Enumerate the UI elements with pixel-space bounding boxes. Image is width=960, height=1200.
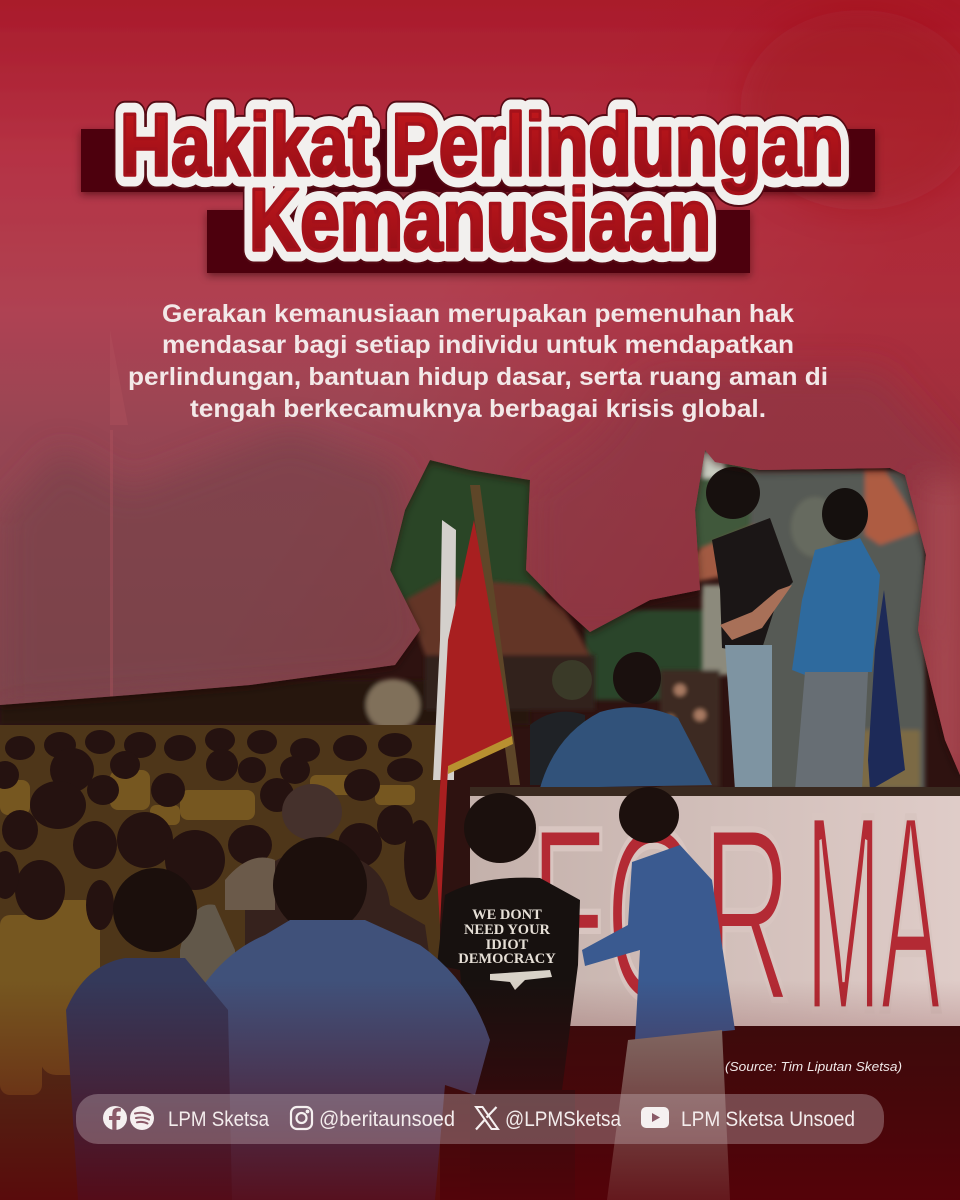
front crowd: student at left <box>66 868 232 1200</box>
title banner bars <box>81 129 875 273</box>
dark tint on lower photo <box>0 980 960 1200</box>
flags and poles <box>433 485 905 925</box>
intro paragraph: perlindungan, bantuan hidup dasar, serta ruang aman di <box>128 363 828 391</box>
icon: spotify <box>130 1106 154 1130</box>
banner with red writing: MA <box>806 757 941 1071</box>
icon: youtube <box>641 1107 669 1128</box>
banner with red writing <box>470 757 960 1071</box>
hall with tiled roof <box>0 578 595 731</box>
intro paragraph: Gerakan kemanusiaan merupakan pemenuhan hak <box>162 300 794 328</box>
intro paragraph <box>128 300 828 423</box>
label: youtube: LPM Sketsa Unsoed <box>681 1108 855 1131</box>
man with slogan t-shirt: IDIOT <box>486 937 529 953</box>
title: Kemanusiaan <box>249 170 711 269</box>
overlay tones and faded silhouettes <box>0 0 960 800</box>
label: instagram: @beritaunsoed <box>319 1108 455 1131</box>
icon: X <box>476 1107 498 1130</box>
man with slogan t-shirt: WE DONT <box>472 907 542 923</box>
crowd base in mustard uniforms <box>0 725 440 1200</box>
photo source credit: (Source: Tim Liputan Sketsa) <box>725 1059 902 1074</box>
title <box>120 95 844 269</box>
man in black shirt on truck <box>706 467 793 790</box>
photo: student protest scene <box>0 440 960 1200</box>
front crowd: student in blue jacket <box>175 837 490 1200</box>
social media bar <box>76 1094 884 1144</box>
monument building and orange roof <box>660 470 925 790</box>
icon: instagram <box>291 1107 312 1129</box>
man with slogan t-shirt: DEMOCRACY <box>458 951 556 967</box>
trees behind the hall <box>385 450 755 700</box>
man with slogan t-shirt: NEED YOUR <box>464 922 551 938</box>
intro paragraph: mendasar bagi setiap individu untuk mendapatkan <box>162 331 794 359</box>
title: Kemanusiaan <box>249 170 711 269</box>
label: facebook and spotify: LPM Sketsa <box>168 1108 269 1131</box>
intro paragraph: tengah berkecamuknya berbagai krisis global. <box>190 395 766 423</box>
man in blue jacket on truck <box>792 488 880 790</box>
torn red overlay <box>0 0 960 775</box>
man with slogan t-shirt <box>437 793 580 1200</box>
man in blue jacket by banner <box>582 787 735 1200</box>
label: X: @LPMSketsa <box>505 1108 621 1131</box>
truck rail <box>470 787 960 796</box>
icon: facebook <box>103 1106 127 1130</box>
banner with red writing: FOR <box>530 776 792 1053</box>
title: Kemanusiaan <box>249 170 711 269</box>
seated men on truck <box>530 652 712 788</box>
